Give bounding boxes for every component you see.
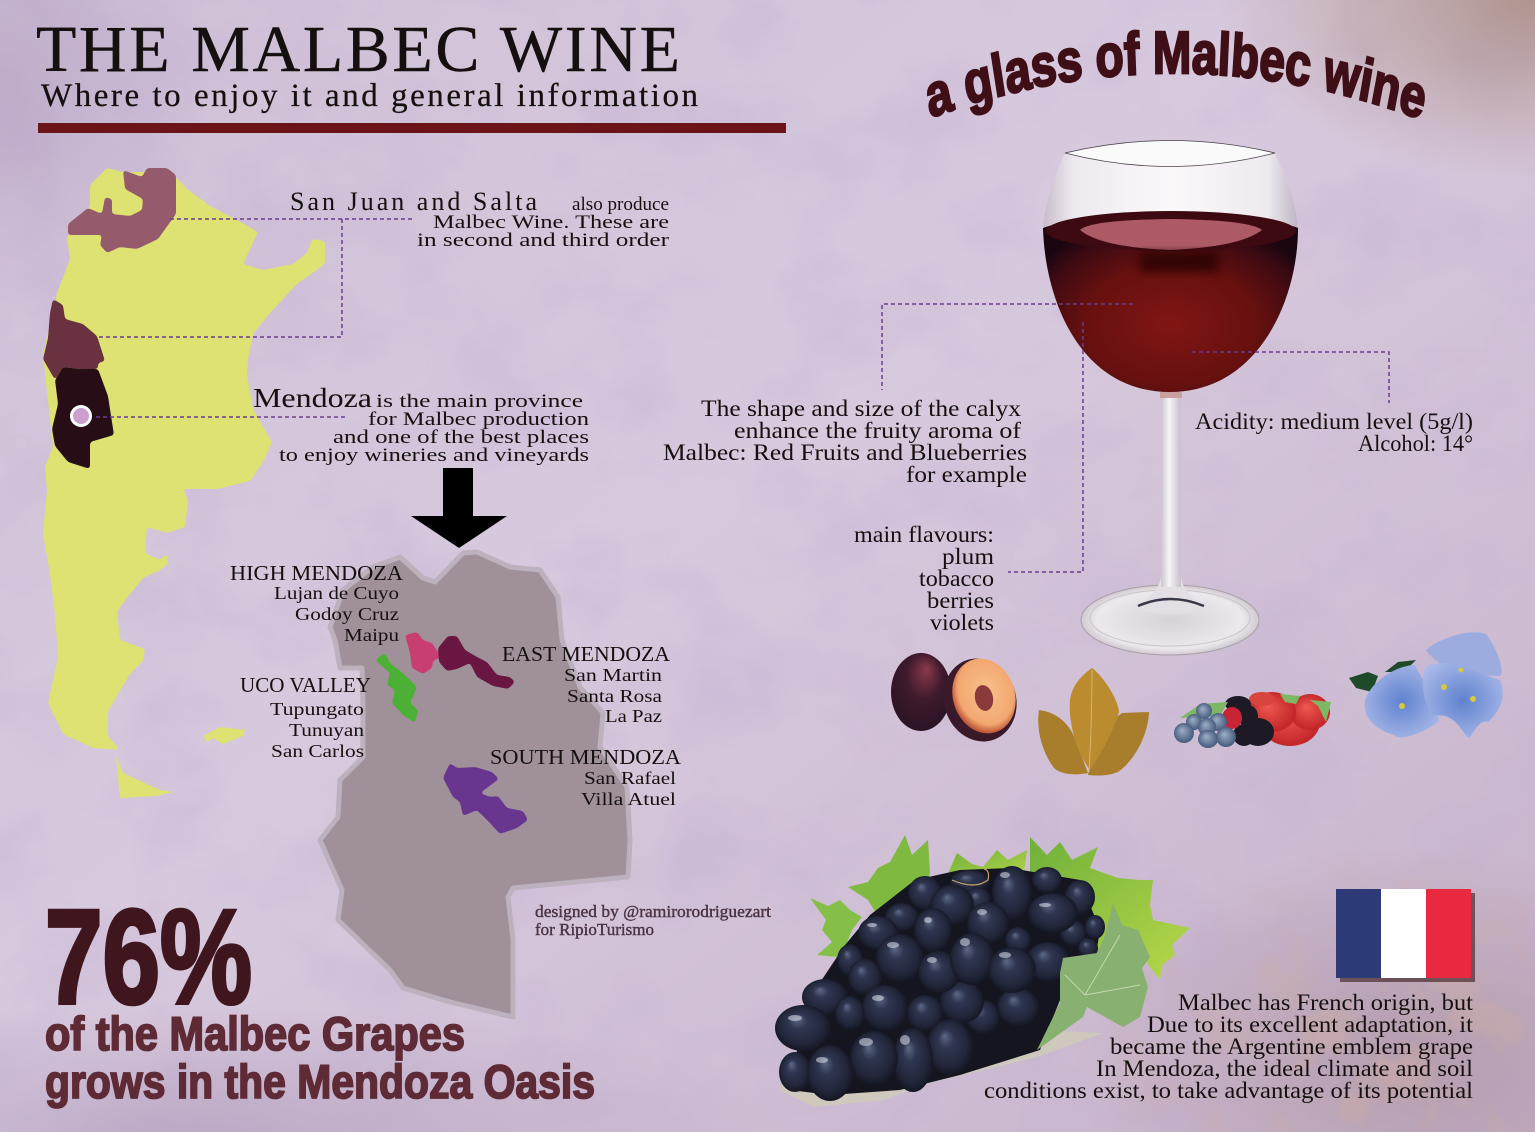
statistic: 76%: 76%	[45, 883, 252, 1032]
labels: High Mendoza: Godoy Cruz	[295, 604, 399, 624]
labels: Uco Valley: Tunuyan	[289, 720, 364, 740]
text: main flavours: violets	[930, 610, 994, 635]
foot	[1081, 585, 1259, 655]
cluster shadow mass	[790, 868, 1100, 1095]
labels: South Mendoza: SOUTH MENDOZA	[490, 745, 682, 769]
text: Mendoza: to enjoy wineries and vineyards	[279, 445, 589, 466]
text: French origin: Due to its excellent adaptation, it	[1147, 1012, 1474, 1037]
subtitle: Where to enjoy it and general information	[41, 78, 698, 114]
Falkland islands	[203, 727, 245, 744]
location marker	[70, 405, 92, 427]
labels: East Mendoza: La Paz	[605, 706, 662, 726]
labels: High Mendoza: HIGH MENDOZA	[230, 561, 404, 585]
zone: Uco Valley	[375, 653, 418, 723]
credit	[535, 902, 771, 939]
zone: East Mendoza	[438, 636, 515, 689]
icon: violets	[1349, 632, 1503, 738]
statistic caption: of the Malbec Grapes	[45, 1007, 465, 1060]
labels: Uco Valley: UCO VALLEY	[240, 673, 371, 697]
labels: Uco Valley: Tupungato	[270, 699, 364, 719]
text: main flavours: plum	[942, 544, 994, 569]
credit: for RipioTurismo	[535, 920, 654, 939]
text: main flavours: tobacco	[919, 566, 994, 591]
text: French origin: Malbec has French origin, but	[1178, 990, 1474, 1015]
dashed leader lines: glass	[882, 304, 1389, 572]
map: Argentina	[43, 168, 325, 798]
region: Mendoza	[52, 367, 114, 469]
bowl upper glass	[1043, 153, 1298, 235]
labels: East Mendoza	[502, 642, 671, 726]
icon: plum	[891, 649, 1027, 751]
labels: High Mendoza: Lujan de Cuyo	[274, 583, 399, 603]
text: San Juan and Salta: San Juan and Salta	[290, 187, 537, 216]
mainland	[43, 168, 325, 750]
labels: High Mendoza	[230, 561, 404, 645]
text: French origin: In Mendoza, the ideal climate and soil	[1096, 1056, 1473, 1081]
shadow	[780, 1030, 1103, 1107]
labels: High Mendoza: Maipu	[344, 625, 399, 645]
grape highlights	[788, 872, 1051, 1063]
text: San Juan and Salta: in second and third order	[417, 230, 670, 251]
labels: South Mendoza: Villa Atuel	[581, 789, 676, 809]
text: acidity and alcohol: Alcohol: 14°	[1358, 431, 1473, 456]
grape tendril	[952, 869, 988, 885]
text: main flavours: main flavours:	[854, 522, 994, 547]
text: Mendoza	[253, 383, 590, 466]
text: main flavours	[854, 522, 994, 635]
statistic caption: grows in the Mendoza Oasis	[45, 1055, 595, 1108]
leaves	[1030, 837, 1190, 980]
labels: South Mendoza: San Rafael	[584, 768, 676, 788]
icon: wine glass	[1043, 140, 1298, 655]
grapes	[775, 866, 1105, 1101]
text: San Juan and Salta: also produce	[572, 194, 669, 215]
text: San Juan and Salta	[290, 187, 670, 251]
region: San Juan	[43, 299, 105, 380]
text: acidity and alcohol: Acidity: medium level (5g/l)	[1195, 409, 1473, 434]
title underline	[38, 123, 786, 133]
text: calyx shape	[663, 396, 1027, 487]
text: French origin: became the Argentine emblem grape	[1110, 1034, 1473, 1059]
labels: South Mendoza	[490, 745, 682, 809]
text: San Juan and Salta: Malbec Wine. These are	[433, 212, 669, 233]
text: acidity and alcohol	[1195, 409, 1473, 456]
map: Mendoza province	[320, 552, 630, 1017]
region: Salta	[68, 168, 176, 253]
rim	[1065, 140, 1275, 166]
front leaf	[1037, 903, 1150, 1050]
arrow	[411, 468, 507, 548]
text: calyx shape: Malbec: Red Fruits and Blueberries	[663, 440, 1027, 465]
wine	[1043, 216, 1298, 392]
text: Mendoza: Mendoza	[253, 383, 372, 413]
zone: High Mendoza	[405, 632, 441, 674]
title: THE MALBEC WINE	[36, 13, 680, 86]
curved heading: a glass of Malbec wine	[927, 30, 1425, 118]
icon: tobacco leaves	[1038, 668, 1149, 776]
labels: East Mendoza: EAST MENDOZA	[502, 642, 671, 666]
statistic caption	[45, 1007, 595, 1108]
stem	[1161, 392, 1181, 587]
flag of France	[1336, 889, 1475, 982]
text: calyx shape: The shape and size of the calyx	[701, 396, 1022, 421]
text: French origin: conditions exist, to take advantage of its potential	[984, 1078, 1473, 1103]
icon: berries	[1174, 692, 1331, 748]
labels: East Mendoza: Santa Rosa	[567, 686, 662, 706]
text: Mendoza: is the main province	[376, 391, 583, 412]
text: Mendoza: for Malbec production	[368, 409, 590, 430]
labels: East Mendoza: San Martin	[564, 665, 662, 685]
text: French origin	[984, 990, 1474, 1103]
icon: grape bunch	[775, 835, 1190, 1107]
Tierra del Fuego	[116, 756, 173, 798]
labels: Uco Valley: San Carlos	[271, 741, 364, 761]
text: calyx shape: enhance the fruity aroma of	[734, 418, 1021, 443]
text: main flavours: berries	[927, 588, 994, 613]
dashed leader lines: map	[96, 219, 415, 417]
text: calyx shape: for example	[906, 462, 1027, 487]
text: Mendoza: and one of the best places	[333, 427, 589, 448]
zone: South Mendoza	[443, 763, 528, 834]
credit: designed by @ramirorodriguezart	[535, 902, 771, 921]
labels: Uco Valley	[240, 673, 371, 761]
